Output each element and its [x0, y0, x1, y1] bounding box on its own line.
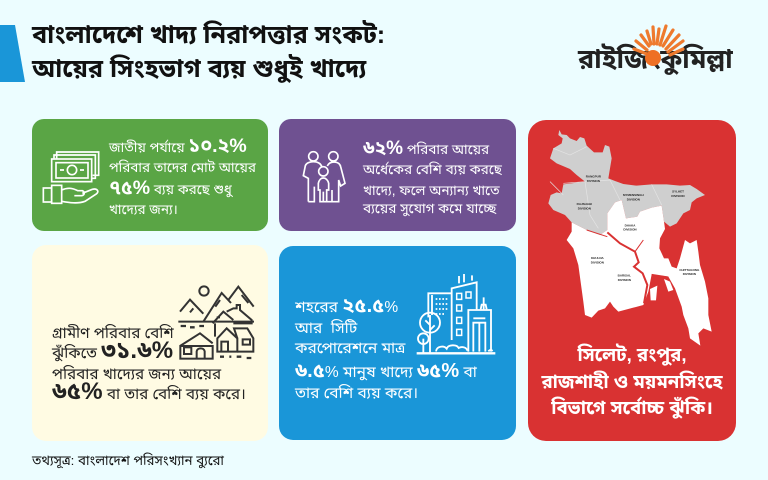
text block: খাদ্যে, ফলে অন্যান্য খাতে — [363, 183, 500, 198]
text block: খাদ্যের জন্য। — [109, 202, 178, 217]
callout text — [541, 344, 723, 419]
text block: করপোরেশনে মাত্র — [295, 340, 405, 357]
text block: আর সিটি — [295, 320, 357, 337]
map of Bangladesh — [548, 130, 712, 346]
division labels: RANGPUR — [586, 175, 602, 179]
text block: অর্ধেকের বেশি ব্যয় করছে — [363, 162, 502, 177]
panel: 62 percent households — [279, 119, 516, 231]
text block — [108, 135, 256, 217]
icon: family — [302, 150, 346, 202]
icon: city buildings — [416, 274, 496, 354]
text block: ৬.৫% মানুষ খাদ্যে ৬৫% বা — [295, 360, 477, 382]
text block — [294, 295, 478, 402]
callout text: বিভাগে সর্বোচ্চ ঝুঁকি। — [551, 397, 713, 418]
logo: Rising Cumilla: রাইজিংকুমিল্লা — [578, 44, 733, 74]
division labels: DIVISION — [587, 179, 600, 183]
division labels: DIVISION — [627, 198, 640, 202]
division labels: DIVISION — [618, 278, 631, 282]
text block: ৬২% পরিবার আয়ের — [363, 138, 489, 159]
icon: village — [178, 285, 254, 360]
title accent shape — [0, 25, 25, 82]
icon: money in hand — [42, 151, 100, 204]
text block: ঝুঁকিতে ৩১.৬% — [52, 337, 173, 364]
panel: division risk map — [528, 120, 736, 441]
division labels: DIVISION — [671, 194, 685, 198]
title — [32, 20, 385, 83]
division labels: BARISAL — [618, 274, 631, 278]
high risk divisions in grey — [548, 130, 705, 235]
text block — [362, 138, 502, 216]
division labels: CHITTAGONG — [679, 268, 700, 272]
text block: পরিবার তাদের মোট আয়ের — [109, 160, 256, 175]
division labels: SYLHET — [672, 190, 684, 194]
callout text: রাজশাহী ও ময়মনসিংহে — [541, 371, 723, 392]
text block: তার বেশি ব্যয় করে। — [295, 385, 418, 402]
callout text: সিলেট, রংপুর, — [577, 344, 687, 365]
panel: rural households — [32, 245, 268, 441]
panel: urban households — [279, 246, 516, 440]
text block: ৭৫% ব্যয় করছে শুধু — [109, 177, 232, 199]
division labels: DIVISION — [578, 206, 591, 210]
division labels: DIVISION — [591, 260, 604, 264]
title: বাংলাদেশে খাদ্য নিরাপত্তার সংকট: — [32, 21, 385, 49]
division labels: KHULNA — [591, 256, 604, 260]
lower divisions in white — [567, 200, 712, 346]
division labels: DIVISION — [683, 272, 696, 276]
source note: তথ্যসূত্র: বাংলাদেশ পরিসংখ্যান ব্যুরো — [32, 453, 224, 468]
text block — [52, 324, 246, 405]
logo: Rising Cumilla — [578, 24, 733, 75]
icon: rising sun — [632, 24, 685, 66]
text block: পরিবার খাদ্যের জন্য আয়ের — [52, 366, 221, 383]
division labels: RAJSHAHI — [577, 202, 592, 206]
division labels — [577, 175, 700, 282]
division labels: DHAKA — [625, 223, 636, 227]
text block: গ্রামীণ পরিবার বেশি — [52, 325, 174, 342]
text block: জাতীয় পর্যায়ে ১০.২% — [109, 135, 247, 157]
division labels: MYMENSINGH — [623, 193, 644, 197]
panel: national share — [32, 119, 268, 231]
title: আয়ের সিংহভাগ ব্যয় শুধুই খাদ্যে — [32, 55, 366, 83]
text block: শহরের ২৫.৫% — [295, 295, 398, 317]
division labels: DIVISION — [623, 228, 637, 232]
text block: ৬৫% বা তার বেশি ব্যয় করে। — [52, 378, 246, 405]
text block: ব্যয়ের সুযোগ কমে যাচ্ছে — [363, 201, 496, 216]
